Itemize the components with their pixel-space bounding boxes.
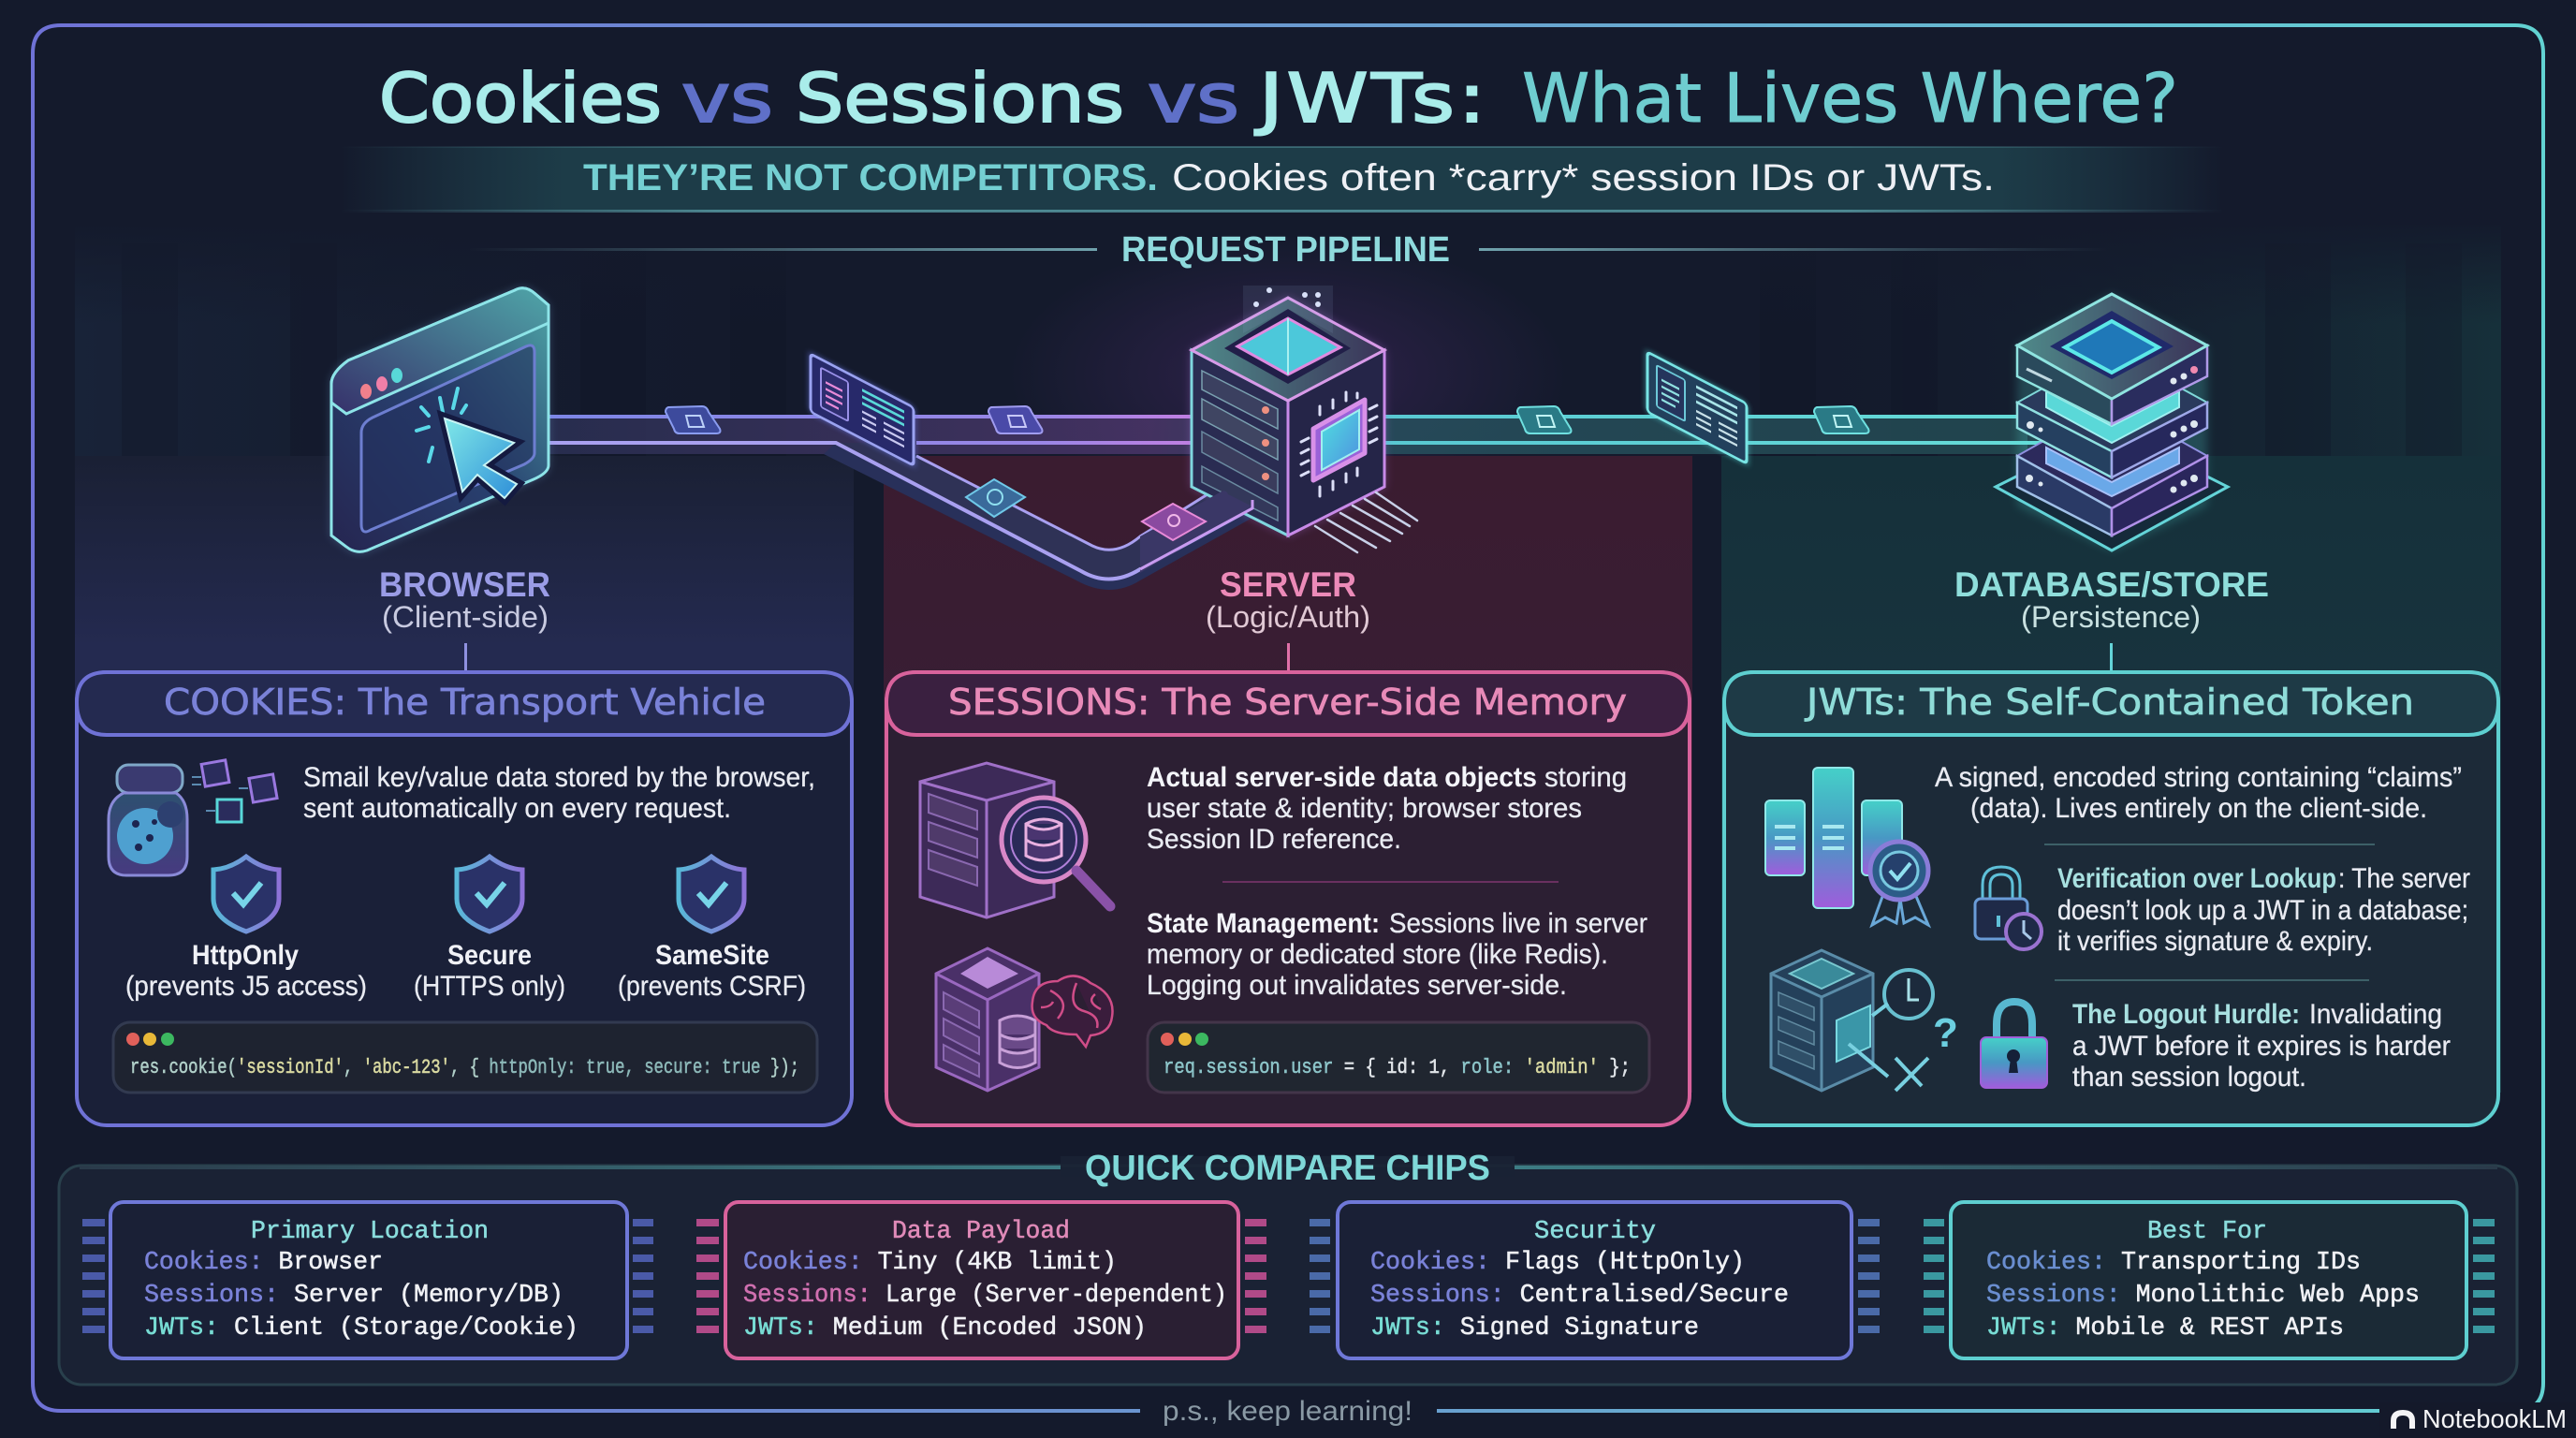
icon: cookie jar (109, 760, 277, 875)
badge: NotebookLM: NotebookLM (2422, 1404, 2567, 1433)
panel: sessions (886, 672, 1690, 1125)
chip: data payload: Data Payload (892, 1218, 1070, 1246)
label: browser: BROWSER (379, 565, 550, 604)
subtitle band: THEY’RE NOT COMPETITORS. (583, 157, 1158, 198)
text: jwt description (1935, 762, 2462, 824)
chip: best for: Cookies: Transporting IDs (1986, 1249, 2361, 1277)
text: logout hurdle: a JWT before it expires is harder (2072, 1031, 2451, 1062)
icon: browser window dots (360, 368, 402, 399)
text: state management: Sessions live in server (1389, 908, 1647, 939)
token: left track 2 (988, 406, 1043, 433)
footer note: p.s., keep learning! (1163, 1396, 1412, 1427)
text: state management: State Management: (1147, 908, 1380, 939)
text: logout hurdle: Invalidating (2309, 999, 2442, 1030)
text: verification over lookup: : The server (2338, 863, 2470, 894)
panel: quick compare chips (59, 1149, 2517, 1385)
chip: data payload: Sessions: Large (Server-dependent) (743, 1282, 1227, 1310)
title: vs (681, 59, 773, 138)
text: state management (1147, 908, 1647, 1001)
icon: ramp end over server (1140, 491, 1252, 573)
label: server (1206, 565, 1370, 672)
icon: jwt token parts with badge (1765, 768, 1928, 925)
server rack slots (1202, 371, 1278, 521)
icon: server with magnifier (920, 763, 1110, 917)
panel header: cookies: COOKIES: The Transport Vehicle (164, 682, 766, 723)
chip: data payload (696, 1202, 1266, 1358)
item: Secure flag (414, 857, 565, 1002)
item: Secure flag: (HTTPS only) (414, 971, 565, 1002)
panel header: sessions: SESSIONS: The Server-Side Memory (948, 682, 1627, 723)
title: Sessions (796, 59, 1124, 138)
icon: server with brain (936, 948, 1113, 1091)
chip: primary location: Sessions: Server (Memory/DB) (144, 1282, 564, 1310)
text: logout hurdle: The Logout Hurdle: (2072, 999, 2300, 1030)
server left face (1192, 350, 1288, 536)
item: SameSite flag: SameSite (655, 940, 769, 971)
chip: security: Security (1534, 1218, 1656, 1246)
layer 1 (2017, 294, 2207, 424)
token: right track 2 (1814, 406, 1868, 433)
panel: jwts (1724, 672, 2498, 1125)
text: verification over lookup: Verification over Lookup (2057, 863, 2336, 894)
text: logout hurdle: than session logout. (2072, 1062, 2306, 1093)
icon: browser (331, 288, 549, 551)
panel header: jwts: JWTs: The Self-Contained Token (1805, 682, 2414, 723)
text: cookies description: Smail key/value data stored by the browser, (303, 762, 815, 793)
badge: NotebookLM (2379, 1402, 2576, 1438)
text: cookies description (303, 762, 815, 824)
icon: database stack (1996, 294, 2228, 550)
token: right track 1 (1517, 406, 1571, 433)
server cpu chip (1301, 392, 1377, 496)
label: database (1954, 565, 2269, 672)
server wires (1315, 492, 1417, 552)
item: SameSite flag (618, 857, 806, 1002)
icon: lock with clock (1975, 867, 2042, 949)
text: jwt description: (data). Lives entirely on the client-side. (1970, 793, 2427, 824)
icon: document card left (809, 351, 915, 468)
base plate (1996, 429, 2228, 550)
item: HttpOnly flag: (prevents J5 access) (125, 971, 367, 1002)
label: database: DATABASE/STORE (1954, 565, 2269, 604)
chip: security: JWTs: Signed Signature (1370, 1314, 1699, 1343)
layer 2 (2017, 350, 2207, 477)
server right face (1288, 350, 1384, 536)
title: vs (1148, 59, 1239, 138)
server top (1192, 298, 1384, 401)
token: left track 1 (666, 406, 721, 433)
code block: sessions (1148, 1022, 1649, 1093)
heading: request pipeline: REQUEST PIPELINE (1121, 230, 1450, 270)
code block: cookies (113, 1022, 817, 1093)
token: ramp diamond teal (966, 479, 1025, 517)
text: sessions description: user state & identity; browser stores (1147, 793, 1582, 824)
subtitle band (340, 146, 2224, 213)
subtitle band: Cookies often *carry* session IDs or JWTs. (1172, 157, 1995, 198)
icon: server (1192, 286, 1417, 552)
text: sessions description: Session ID reference. (1147, 824, 1401, 855)
text: sessions description: storing (1544, 762, 1627, 793)
column: server background (884, 456, 1692, 1093)
label: database: (Persistence) (2021, 600, 2201, 634)
text: logout hurdle (2072, 999, 2451, 1093)
pipeline track (549, 417, 2050, 590)
text: verification over lookup: doesn’t look up a JWT in a database; (2057, 895, 2468, 926)
chip: primary location: Cookies: Browser (144, 1249, 383, 1277)
chip: security (1310, 1202, 1880, 1358)
item: HttpOnly flag: HttpOnly (192, 940, 299, 971)
column: browser background (75, 456, 854, 1093)
chip: best for: JWTs: Mobile & REST APIs (1986, 1314, 2344, 1343)
chip: security: Sessions: Centralised/Secure (1370, 1282, 1789, 1310)
text: state management: memory or dedicated store (like Redis). (1147, 939, 1608, 970)
text: state management: Logging out invalidates server-side. (1147, 970, 1567, 1001)
chip: best for (1924, 1202, 2495, 1358)
icon: flying cookie data squares (192, 760, 277, 822)
chip: security: Cookies: Flags (HttpOnly) (1370, 1249, 1745, 1277)
text: sessions description (1147, 762, 1627, 855)
title: JWTs: (1254, 59, 1489, 138)
heading: quick compare chips: QUICK COMPARE CHIPS (1085, 1149, 1490, 1188)
icon: cursor with click rays (417, 389, 517, 498)
text: cookies description: sent automatically on every request. (303, 793, 731, 824)
code block: cookies: res.cookie('sessionId', 'abc-123', { httpOnly: true, secure: true }); (130, 1056, 799, 1079)
panel header: cookies (77, 672, 852, 735)
title: Cookies (379, 59, 662, 138)
chip: data payload: JWTs: Medium (Encoded JSON) (743, 1314, 1147, 1343)
chip: best for: Best For (2147, 1218, 2267, 1246)
chip: primary location: JWTs: Client (Storage/Cookie) (144, 1314, 578, 1343)
label: browser: (Client-side) (382, 600, 549, 634)
text: verification over lookup (2057, 863, 2470, 957)
chip: primary location (82, 1202, 653, 1358)
heading: request pipeline (468, 230, 2108, 270)
title: What Lives Where? (1522, 59, 2178, 138)
icon: server with clock and cut: ? (1933, 1010, 1958, 1056)
icon: padlock (1981, 1002, 2047, 1088)
item: Secure flag: Secure (447, 940, 532, 971)
text: sessions description: Actual server-side data objects (1147, 762, 1537, 793)
panel: cookies (77, 672, 852, 1125)
title (379, 59, 2178, 138)
layer 3 (2017, 403, 2207, 536)
panel header: sessions (886, 672, 1690, 735)
chip: best for: Sessions: Monolithic Web Apps (1986, 1282, 2420, 1310)
label: server: SERVER (1220, 565, 1356, 604)
label: browser (379, 565, 550, 672)
text: jwt description: A signed, encoded string containing “claims” (1935, 762, 2462, 793)
item: SameSite flag: (prevents CSRF) (618, 971, 806, 1002)
item: HttpOnly flag (125, 857, 367, 1002)
text: verification over lookup: it verifies signature & expiry. (2057, 926, 2373, 957)
panel header: jwts (1724, 672, 2498, 735)
chip: data payload: Cookies: Tiny (4KB limit) (743, 1249, 1117, 1277)
label: server: (Logic/Auth) (1206, 600, 1370, 634)
chip: primary location: Primary Location (251, 1218, 489, 1246)
icon: server with clock and cut (1771, 950, 1958, 1091)
column: database background (1721, 456, 2501, 1093)
icon: document card right (1646, 349, 1749, 466)
code block: sessions: req.session.user = { id: 1, role: 'admin' }; (1164, 1056, 1631, 1079)
